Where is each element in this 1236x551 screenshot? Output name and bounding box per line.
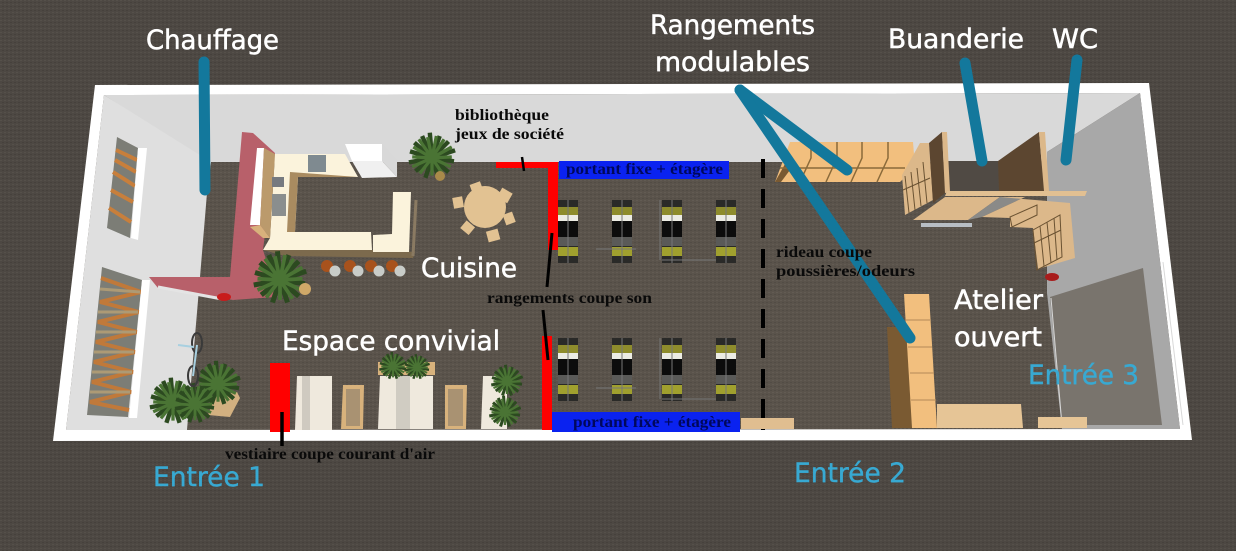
note: rideau coupe poussières/odeurs: rideau coupe	[776, 244, 872, 261]
label: Entrée 2: Entrée 2	[794, 458, 906, 489]
blue fixed rack bottom: portant fixe + étagère	[573, 414, 731, 431]
pink partition wall	[149, 132, 275, 301]
heading: Cuisine: Cuisine	[421, 253, 517, 284]
right wall and yard	[1045, 93, 1183, 429]
note: rideau coupe poussières/odeurs: poussières/odeurs	[776, 263, 915, 280]
heading: Espace convivial: Espace convivial	[282, 326, 500, 357]
bicycle	[178, 333, 202, 386]
clothes racks top row	[558, 200, 736, 263]
heading: Buanderie: Buanderie	[888, 24, 1024, 55]
label: Entrée 1: Entrée 1	[153, 462, 265, 493]
left wall	[66, 95, 211, 430]
arrow: Buanderie	[965, 63, 982, 161]
dashed curtain line	[761, 159, 765, 430]
note: rideau coupe poussières/odeurs	[776, 244, 915, 280]
red partition: lower storage	[542, 336, 552, 430]
note: bibliothèque jeux de société: bibliothèque	[455, 107, 549, 124]
arrow: WC	[1066, 60, 1077, 160]
laundry room block	[902, 132, 1087, 270]
kitchen	[250, 144, 416, 258]
arrow: Rangements modulables top	[740, 90, 847, 170]
heading: Atelier ouvert: Atelier	[954, 285, 1043, 316]
floor	[66, 93, 1180, 430]
note: vestiaire coupe courant d'air: vestiaire coupe courant d'air	[225, 446, 435, 463]
leader: vestiaire	[280, 412, 284, 446]
heading: Chauffage: Chauffage	[146, 25, 279, 56]
arrow: Rangements modulables bottom	[740, 90, 910, 338]
heading: Atelier ouvert	[954, 285, 1043, 353]
arrow: Chauffage	[204, 62, 205, 190]
bar stools	[321, 260, 406, 276]
note: bibliothèque jeux de société	[454, 107, 564, 143]
blue fixed rack bottom	[552, 412, 740, 432]
modular shelves bottom	[741, 294, 1087, 429]
heading: Rangements modulables: modulables	[655, 47, 810, 78]
heading: Rangements modulables	[650, 10, 815, 78]
leader: bibliothèque	[522, 157, 524, 171]
left windows	[87, 137, 150, 418]
round dining table	[452, 181, 516, 242]
modular shelves top	[775, 142, 915, 182]
leader: rangements upper	[547, 233, 552, 287]
note: bibliothèque jeux de société: jeux de société	[454, 126, 564, 143]
plants	[150, 133, 455, 423]
label: Entrée 3: Entrée 3	[1028, 360, 1139, 391]
heading: Atelier ouvert: ouvert	[954, 322, 1042, 353]
red partition: cloakroom	[270, 363, 290, 432]
note: rangements coupe son: rangements coupe son	[487, 290, 652, 307]
heading: WC: WC	[1052, 24, 1098, 55]
back wall	[104, 93, 1140, 162]
red partition: bookcase	[496, 162, 558, 250]
clothes racks bottom row	[558, 338, 736, 401]
building outer white wall	[53, 83, 1192, 441]
heading: Rangements modulables: Rangements	[650, 10, 815, 41]
lounge sofas and coffee tables	[295, 352, 523, 430]
leader: rangements lower	[543, 310, 548, 360]
blue fixed rack top: portant fixe + étagère	[566, 161, 723, 178]
